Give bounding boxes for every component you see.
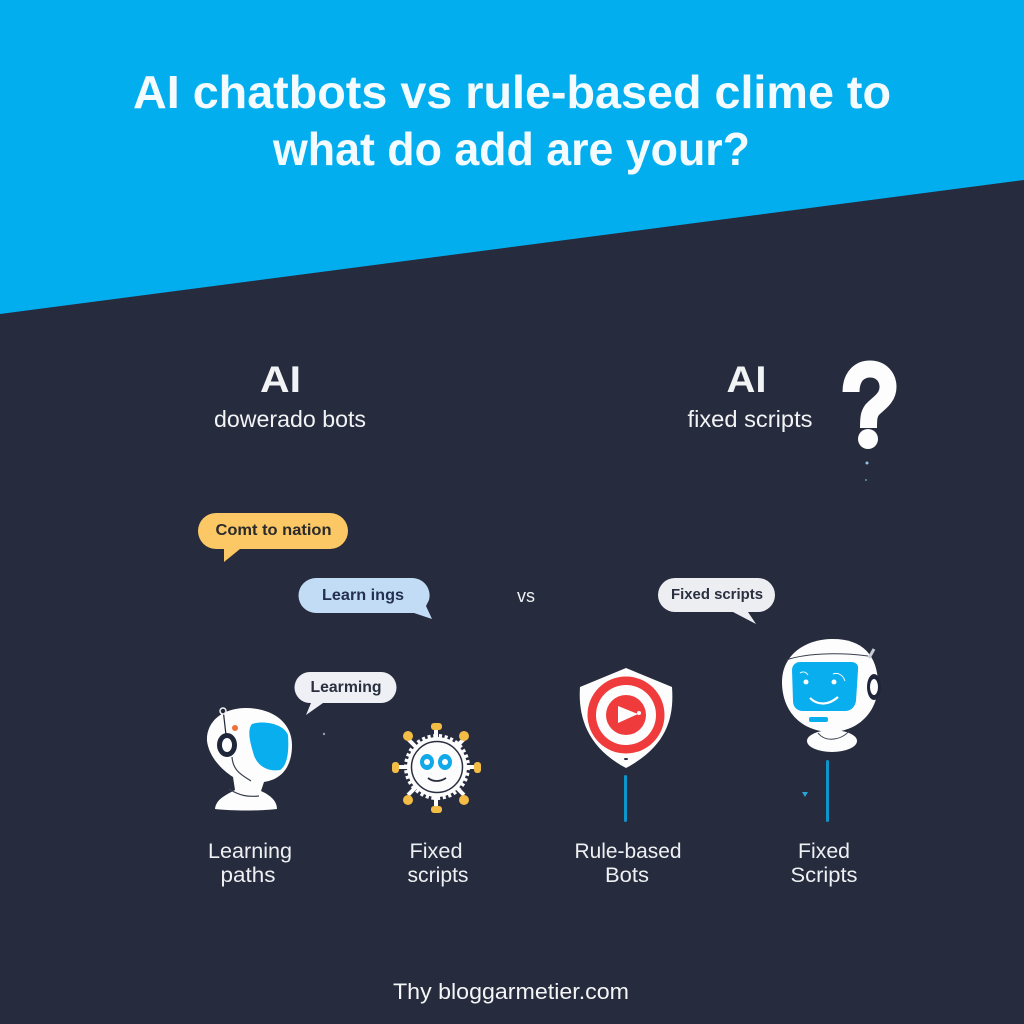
connector line under robot, with small marker bbox=[802, 760, 829, 822]
label: Rule-based Bots bbox=[574, 840, 682, 887]
icon: smiling sun gear bot bbox=[392, 723, 481, 813]
label: Rule-based Bots: Rule-based bbox=[574, 840, 682, 863]
speech bubble: Learnings bbox=[298, 578, 432, 619]
title bbox=[133, 66, 891, 175]
speech bubble: Learming bbox=[294, 672, 396, 715]
label: Fixed scripts: scripts bbox=[408, 864, 468, 887]
blue diagonal header banner bbox=[0, 0, 1024, 314]
footer: Thy bloggarmetier.com bbox=[393, 979, 629, 1004]
title: what do add are your? bbox=[272, 123, 750, 175]
label: Fixed Scripts: Scripts bbox=[790, 864, 858, 887]
speech bubble: Learnings: Learn ings bbox=[322, 587, 404, 604]
connector line under shield bbox=[624, 775, 627, 822]
speech bubble: Comt to nation: Comt to nation bbox=[216, 522, 332, 539]
title: AI chatbots vs rule-based clime to bbox=[133, 66, 891, 118]
label: Learning paths bbox=[208, 840, 292, 887]
speech bubble: Fixed scripts bbox=[658, 578, 775, 624]
label: Learning paths: paths bbox=[220, 864, 276, 887]
right column heading bbox=[688, 359, 812, 432]
speech bubble: Fixed scripts: Fixed scripts bbox=[671, 586, 763, 603]
label: Learning paths: Learning bbox=[208, 840, 292, 863]
icon: red target shield bbox=[580, 668, 672, 768]
left column heading: dowerado bots bbox=[214, 406, 366, 432]
label: Rule-based Bots: Bots bbox=[605, 864, 649, 887]
vs label: vs bbox=[517, 586, 535, 606]
speech bubble: Comt to nation bbox=[198, 513, 348, 562]
icon: smiling monitor robot bbox=[782, 639, 881, 752]
speech bubble: Learming: Learming bbox=[310, 679, 382, 696]
label: Fixed scripts: Fixed bbox=[410, 840, 462, 863]
right column heading: AI bbox=[726, 359, 766, 400]
label: Fixed Scripts: Fixed bbox=[798, 840, 850, 863]
label: Fixed Scripts bbox=[790, 840, 858, 887]
label: Fixed scripts bbox=[408, 840, 468, 887]
icon: robot head with headset, left bbox=[207, 708, 325, 810]
left column heading: AI bbox=[260, 359, 301, 400]
icon: question mark bbox=[851, 369, 888, 481]
left column heading bbox=[214, 359, 366, 432]
right column heading: fixed scripts bbox=[688, 406, 812, 432]
